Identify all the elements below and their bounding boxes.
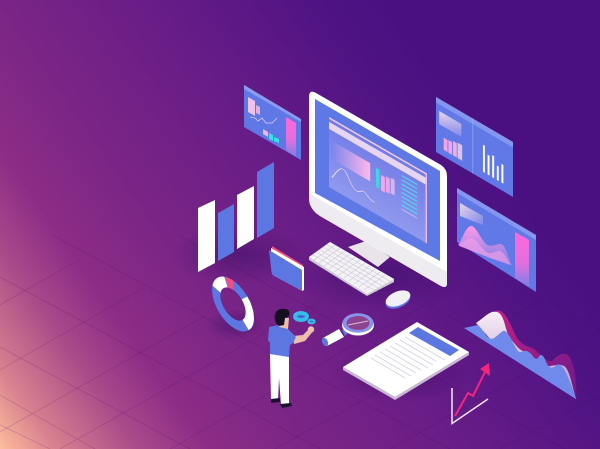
mini bars xyxy=(376,168,395,198)
floor grid xyxy=(0,235,534,449)
magenta back wave xyxy=(496,311,576,399)
line chart xyxy=(332,163,375,203)
pale card xyxy=(439,111,461,137)
hair xyxy=(275,309,289,326)
monitor stand xyxy=(348,241,390,267)
document xyxy=(343,322,469,400)
white mid wave xyxy=(476,312,576,399)
monitor screen xyxy=(315,99,440,261)
data rows xyxy=(402,175,417,219)
handle xyxy=(323,329,344,346)
hand xyxy=(308,326,314,333)
application window xyxy=(329,117,427,244)
neck and face xyxy=(279,318,289,329)
white bars xyxy=(483,145,503,184)
area waves xyxy=(458,226,513,266)
icon: mouse xyxy=(383,287,413,312)
arrow xyxy=(455,372,485,416)
panel: right floating area chart dashboard xyxy=(457,188,536,292)
icon: folder xyxy=(269,246,304,291)
document header xyxy=(409,327,459,356)
monitor chin xyxy=(309,194,447,287)
panel: top left floating dashboard xyxy=(244,85,301,160)
axes xyxy=(452,388,488,424)
icon: magnifying glass xyxy=(321,313,374,347)
legs xyxy=(270,354,289,404)
mini line chart xyxy=(250,117,277,123)
blue front wave xyxy=(464,325,576,399)
bar chart: 3D columns xyxy=(198,162,274,272)
shoes xyxy=(271,398,292,408)
pale card xyxy=(460,203,483,225)
cyan mini bars xyxy=(263,129,279,143)
panel: top right floating dashboard xyxy=(436,97,513,197)
bars xyxy=(248,97,260,116)
keys xyxy=(312,244,390,292)
arm xyxy=(293,327,314,344)
person xyxy=(268,309,314,408)
monitor body xyxy=(309,92,447,287)
shirt xyxy=(268,325,296,357)
area chart: isometric waves xyxy=(464,311,576,399)
gradient card xyxy=(333,142,370,181)
keyboard xyxy=(309,242,394,296)
lens xyxy=(342,314,374,336)
pink side bar xyxy=(515,232,529,287)
donut chart xyxy=(209,276,257,332)
icon: gears xyxy=(295,313,314,323)
pink bars xyxy=(444,134,462,161)
pink side bar xyxy=(286,117,296,157)
monitor xyxy=(309,92,447,287)
document text lines xyxy=(371,337,445,378)
growth chart with arrow xyxy=(452,363,490,424)
ground shadows xyxy=(170,225,470,403)
